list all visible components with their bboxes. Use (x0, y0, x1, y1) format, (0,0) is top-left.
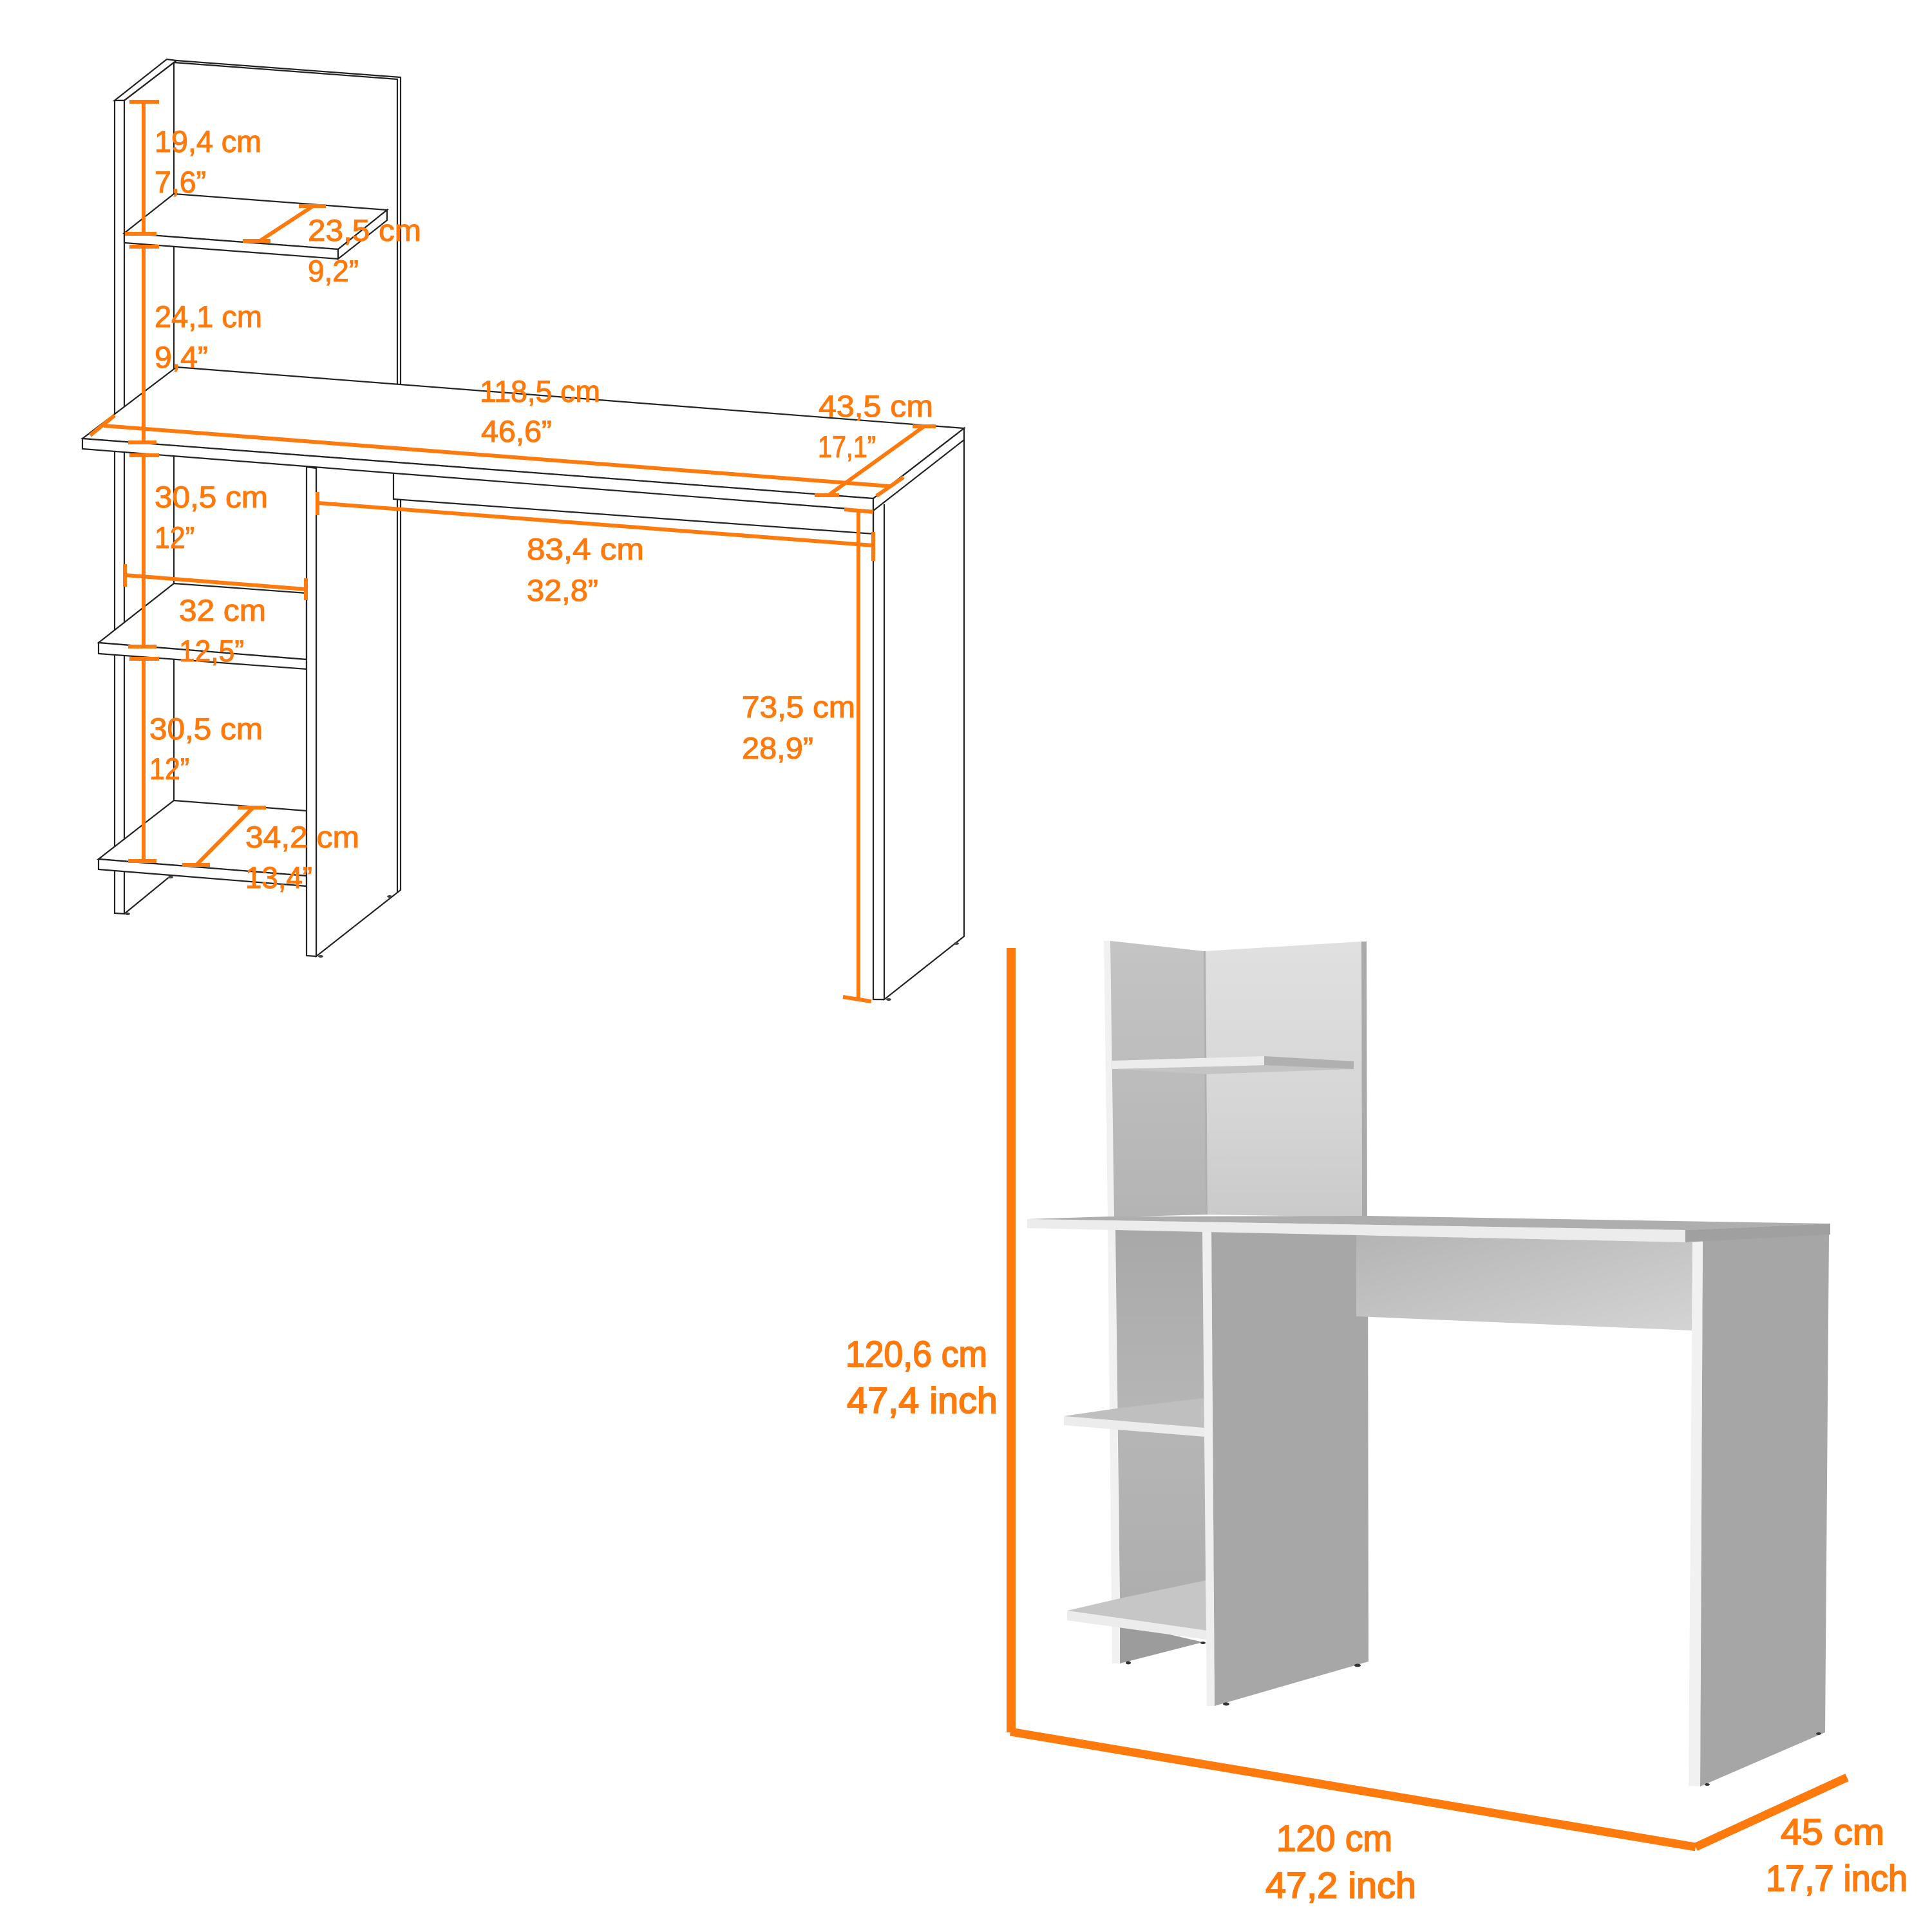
label 43,5 cm: 43,5 cm (819, 389, 933, 423)
label 13,4 in: 13,4” (245, 860, 312, 895)
label 7,6 in: 7,6” (155, 165, 206, 199)
upper back panel (1204, 942, 1367, 1217)
label 46,6 in: 46,6” (481, 414, 552, 448)
label 19,4 cm: 19,4 cm (155, 124, 261, 158)
dimension labels on drawing (149, 124, 933, 895)
desktop (1027, 1216, 1830, 1242)
middle shelf (1064, 1398, 1205, 1437)
dimension: 43,5 cm (815, 426, 936, 496)
label 17,7 inch: 17,7 inch (1766, 1858, 1908, 1899)
label 9,4 in: 9,4” (155, 340, 208, 374)
lower left upright and back (115, 451, 174, 915)
label 12,5 in: 12,5” (179, 634, 244, 668)
label 30,5 cm upper: 30,5 cm (155, 480, 268, 514)
right side panel (1689, 1235, 1829, 1786)
label 34,2 cm: 34,2 cm (245, 820, 359, 854)
label 12 in upper: 12” (155, 520, 194, 554)
middle shelf (99, 583, 307, 669)
upper left panel (1104, 941, 1206, 1217)
depth line (1696, 1777, 1847, 1847)
lower left upright (1108, 1227, 1206, 1663)
dimension: 32 cm (125, 564, 306, 600)
overall dimension lines (1007, 948, 1847, 1847)
bottom shelf (1067, 1580, 1207, 1640)
label 9,2 in: 9,2” (308, 254, 359, 288)
upper shelf (1112, 1056, 1354, 1074)
bottom shelf (99, 800, 307, 886)
feet (1126, 1642, 1821, 1786)
label 73,5 cm: 73,5 cm (742, 690, 855, 724)
dimension: 118,5 cm (90, 415, 904, 496)
dimension: 30,5 cm lower (128, 659, 159, 861)
label 12 in lower: 12” (149, 752, 189, 786)
label 47,4 inch: 47,4 inch (847, 1380, 998, 1421)
dimension: 73,5 cm (843, 509, 873, 1001)
dimension: 34,2 cm (182, 808, 266, 865)
label 30,5 cm lower: 30,5 cm (149, 712, 263, 746)
label 28,9 in: 28,9” (742, 731, 813, 765)
product render: white desk (1027, 941, 1830, 1786)
overall labels (846, 1334, 1908, 1906)
desktop (82, 367, 964, 511)
label 45 cm: 45 cm (1781, 1812, 1884, 1853)
dimension: 30,5 cm upper (128, 455, 159, 647)
back panel and left upright outline (115, 59, 401, 419)
width line (1010, 1732, 1696, 1847)
dimension: 19,4 cm (125, 102, 159, 234)
label 23,5 cm: 23,5 cm (308, 213, 421, 247)
dimension: 23,5 cm (243, 206, 326, 242)
label 83,4 cm: 83,4 cm (527, 532, 644, 566)
label 32,8 in: 32,8” (527, 573, 598, 607)
label 47,2 inch: 47,2 inch (1265, 1865, 1416, 1906)
label 120 cm: 120 cm (1276, 1818, 1392, 1859)
apron (393, 473, 873, 534)
right side panel (873, 440, 964, 1001)
line drawing: desk with dimensions (82, 59, 964, 1001)
height line (1007, 948, 1016, 1732)
label 32 cm: 32 cm (179, 593, 266, 627)
central side panel (1202, 1231, 1368, 1706)
dimension: 83,4 cm (317, 492, 873, 561)
central side panel (307, 467, 401, 958)
dimension lines (90, 102, 936, 1001)
label 24,1 cm: 24,1 cm (155, 299, 262, 334)
dimension: 24,1 cm (128, 247, 159, 442)
label 120,6 cm: 120,6 cm (846, 1334, 987, 1375)
label 118,5 cm: 118,5 cm (480, 374, 600, 408)
label 17,1 in: 17,1” (818, 430, 876, 464)
upper shelf (124, 194, 387, 259)
apron (1356, 1235, 1692, 1331)
